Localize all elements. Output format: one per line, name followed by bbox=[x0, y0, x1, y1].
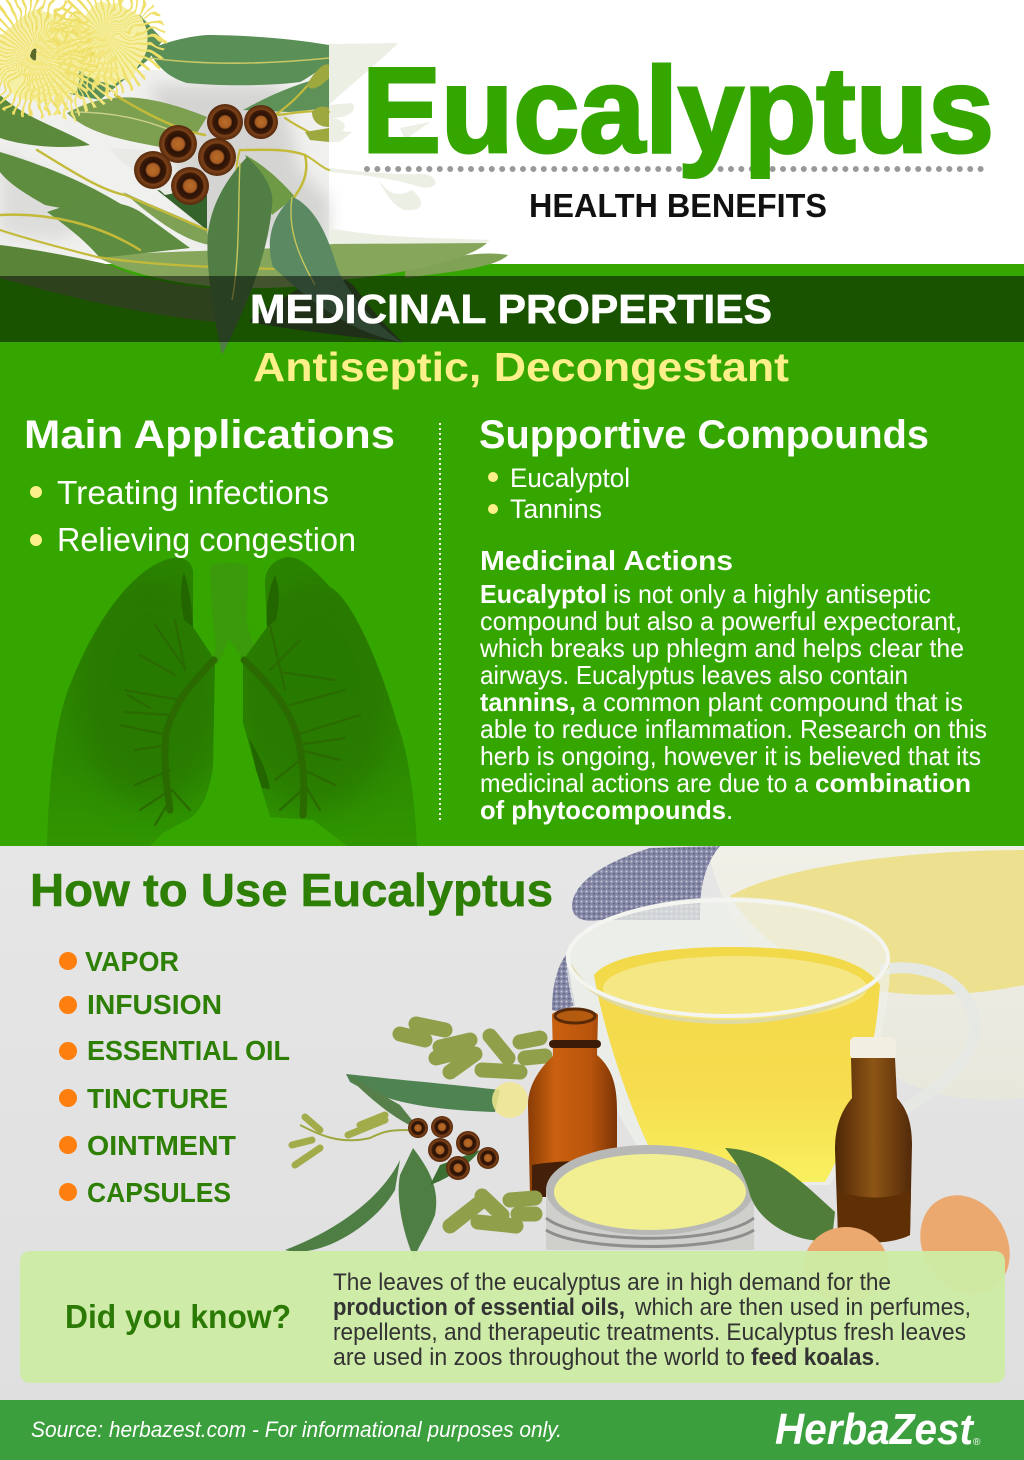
heading: Did you know? bbox=[65, 1298, 291, 1335]
panel: main applications bbox=[24, 413, 395, 558]
paragraph: able to reduce inflammation. Research on this bbox=[480, 714, 987, 744]
how to use heading: How to Use Eucalyptus bbox=[30, 864, 553, 916]
registered mark: ® bbox=[973, 1437, 981, 1448]
paragraph: Eucalyptol bbox=[480, 579, 607, 609]
stems bbox=[0, 72, 330, 270]
subheading: medicinal actions: Medicinal Actions bbox=[480, 545, 733, 576]
list: how to use bbox=[59, 946, 290, 1208]
properties line: Antiseptic, Decongestant bbox=[253, 344, 789, 390]
fact text bbox=[333, 1269, 971, 1371]
panel: supportive compounds bbox=[479, 413, 987, 825]
photo background shading bbox=[0, 70, 329, 260]
glass cup bbox=[567, 897, 975, 1185]
right amber bottle bbox=[835, 1037, 912, 1242]
leaf beside tin bbox=[725, 1148, 835, 1241]
flower bbox=[0, 2, 163, 103]
dotted rule bbox=[367, 166, 990, 172]
fact text: . bbox=[874, 1344, 881, 1371]
botanical photo: eucalyptus branch bbox=[0, 2, 508, 355]
paragraph bbox=[479, 579, 987, 825]
paragraph: . bbox=[726, 795, 733, 825]
paragraph: a common plant compound that is bbox=[582, 687, 963, 717]
item: essential oil: ESSENTIAL OIL bbox=[87, 1035, 290, 1066]
heading: MEDICINAL PROPERTIES bbox=[250, 286, 772, 332]
gum nuts bbox=[134, 104, 278, 205]
almonds bbox=[804, 1179, 1024, 1311]
paragraph: tannins, bbox=[480, 687, 576, 717]
logo: HerbaZest bbox=[775, 1405, 975, 1454]
capsules lower group bbox=[450, 1196, 535, 1226]
fact text: production of essential oils, bbox=[333, 1294, 625, 1321]
fact text: repellents, and therapeutic treatments. Eucalyptus fresh leaves bbox=[333, 1319, 966, 1346]
left amber bottle bbox=[528, 1009, 617, 1197]
fact text: The leaves of the eucalyptus are in high demand for the bbox=[333, 1269, 891, 1296]
list item: tannins: Tannins bbox=[510, 494, 602, 524]
heading: Main Applications bbox=[24, 413, 395, 457]
small eucalyptus sprig bbox=[285, 1074, 528, 1260]
heading: Supportive Compounds bbox=[479, 413, 929, 457]
paragraph: of phytocompounds bbox=[480, 795, 726, 825]
paragraph: is not only a highly antiseptic bbox=[613, 579, 931, 609]
paragraph: airways. Eucalyptus leaves also contain bbox=[480, 660, 908, 690]
fact text: feed koalas bbox=[751, 1344, 874, 1371]
fact text: which are then used in perfumes, bbox=[634, 1294, 971, 1321]
footer bbox=[31, 1405, 981, 1454]
item: vapor: VAPOR bbox=[85, 946, 179, 977]
lower long leaves bbox=[250, 268, 403, 343]
list item: treating infections: Treating infections bbox=[57, 474, 329, 511]
lungs illustration bbox=[47, 557, 417, 846]
paragraph: which breaks up phlegm and helps clear the bbox=[479, 633, 964, 663]
buds bbox=[305, 64, 329, 142]
faded leaves beyond the photo bbox=[329, 43, 490, 252]
paragraph: combination bbox=[815, 768, 971, 798]
header band: medicinal properties bbox=[0, 276, 1024, 342]
subtitle: HEALTH BENEFITS bbox=[529, 187, 827, 224]
central hanging leaves bbox=[207, 157, 272, 355]
fact text: are used in zoos throughout the world to bbox=[333, 1344, 745, 1371]
panel: did you know bbox=[20, 1251, 1005, 1383]
item: capsules: CAPSULES bbox=[87, 1177, 231, 1208]
upper leaves bbox=[148, 35, 329, 85]
capsules upper group bbox=[400, 1024, 545, 1072]
towel bbox=[552, 846, 720, 1012]
paragraph: medicinal actions are due to a bbox=[480, 768, 809, 798]
source note: Source: herbazest.com - For informational purposes only. bbox=[31, 1417, 562, 1442]
item: tincture: TINCTURE bbox=[87, 1083, 228, 1114]
list item: eucalyptol: Eucalyptol bbox=[510, 463, 630, 493]
paragraph: compound but also a powerful expectorant, bbox=[480, 606, 962, 636]
item: infusion: INFUSION bbox=[87, 989, 222, 1020]
photo: remedies still life bbox=[285, 846, 1024, 1311]
paragraph: herb is ongoing, however it is believed that its bbox=[480, 741, 981, 771]
rear bowl bbox=[708, 846, 1024, 1100]
item: ointment: OINTMENT bbox=[87, 1130, 236, 1161]
tin of ointment bbox=[546, 1145, 754, 1250]
list item: relieving congestion: Relieving congestion bbox=[57, 521, 356, 558]
title: Eucalyptus bbox=[362, 42, 994, 178]
